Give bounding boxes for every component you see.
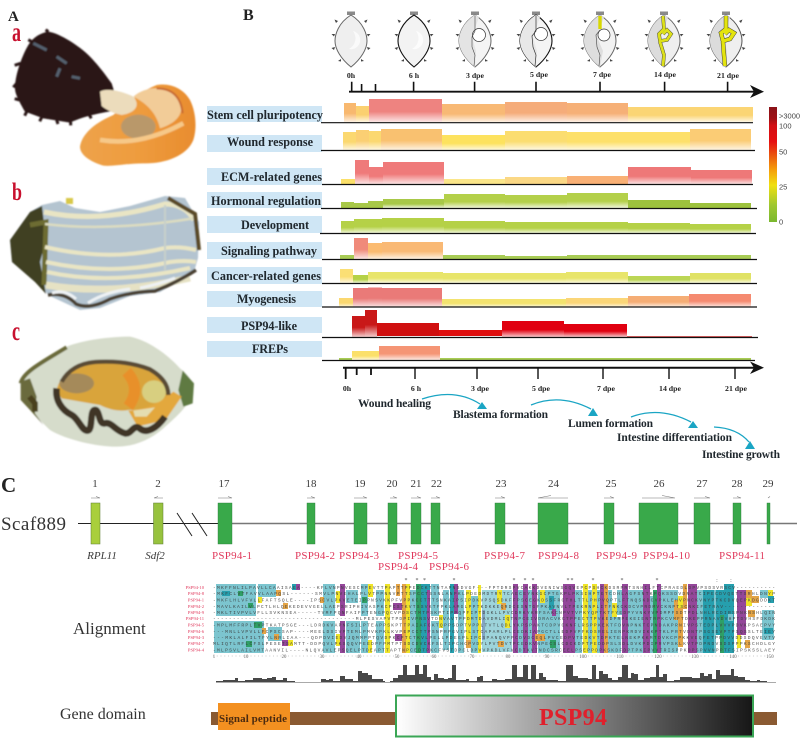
residue colour blocks xyxy=(214,584,774,653)
signal peptide block: Signal peptide xyxy=(219,713,287,725)
position ruler xyxy=(213,655,775,660)
chart row: Development: Development xyxy=(241,218,309,232)
position ruler: 60 xyxy=(432,655,437,660)
aligned residues: -MKLTIVPVLVFLLSVKNSEA-----TVMFPQNFAIFPTENGPQCVPDSCTMTPSKPTIPPQPFIPTDGKLLPVCDRKYKRFSAKCNPVTVPKYQPTKTFYEDPYVNKYVPDMPFSDTPDLNHLRCDIRSPNKNSHLQIN xyxy=(213,610,775,616)
top timeline arrow: 5 dpe xyxy=(530,70,549,79)
sequence names: PSP94-10 xyxy=(186,585,205,590)
position ruler: 100 xyxy=(579,655,587,660)
chart row: Signaling pathway: Signaling pathway xyxy=(221,244,317,258)
alignment heading: Alignment xyxy=(73,619,146,638)
gene domain diagram xyxy=(211,696,777,736)
aligned residues: -MAVLKAILVLPCTLHLQEKEDEVVGELLAEPSRIPHIVASPKCPCSTKVTSSVKTFPKLAMGLPPTKDKKEQRDCESNTGFPKAVNVLTPEKRNPLITFNKCKDCVPRDMVCKNPTSCNKIFETRAV------------- xyxy=(213,604,775,610)
process flow: healing stages and arrows: Wound healing xyxy=(358,398,431,410)
bottom timeline arrow: 6 h xyxy=(411,384,422,393)
aligned residues: -MKFCLVTFAVVLAAPQSL------SMVLPNVEHALPLVTPPNNVPTTSPCCTSSNLANPKLPDEDMDTRYTCAECEYNKGCPTGKPLPKSIHPTGTCDHLAGFSNTKPQKSSDVDNATCIPECDVQETTSRHLDNYP xyxy=(213,591,775,597)
aligned residues: ------------------------------------MLPESVAPVTPDPIVPNSVTDNVAVTPPDMTDAVDMLIQTNPCEIVDRACVKCTPPECTTPVKEDPRPEKEIENTRPKCVMFTDKEPPRNAVDVHPTDVHSFDKDK xyxy=(213,616,775,622)
sequence names: PSP94-1 xyxy=(188,598,205,602)
icon: shell at 0h xyxy=(332,12,370,67)
conservation markers: * xyxy=(524,578,526,584)
process flow: healing stages and arrows: Blastema formation xyxy=(453,409,549,421)
gene map track: RPL11 xyxy=(86,550,117,562)
process flow: healing stages and arrows: Lumen formation xyxy=(568,418,654,430)
chart row: ECM-related genes: ECM-related genes xyxy=(221,170,322,184)
gene map track: 28 xyxy=(732,478,743,490)
gene map track: 23 xyxy=(496,478,507,490)
top timeline arrow: 7 dpe xyxy=(593,70,612,79)
aligned residues xyxy=(213,585,775,654)
position ruler: 110 xyxy=(616,655,624,660)
panel label b: b xyxy=(12,177,22,206)
gene map track: 20 xyxy=(386,478,398,490)
bottom timeline arrow: 14 dpe xyxy=(659,384,681,393)
colour scale legend: 0 xyxy=(779,218,783,226)
gene map track: PSP94-11 xyxy=(719,550,765,562)
conservation markers: * xyxy=(566,578,570,584)
sequence names: PSP94-7 xyxy=(188,641,205,646)
gene map track: 18 xyxy=(306,478,317,490)
panel label B: B xyxy=(243,7,254,24)
chart row: Myogenesis: Myogenesis xyxy=(237,292,296,306)
conservation markers: * xyxy=(592,578,594,584)
sequence names: PSP94-11 xyxy=(186,616,205,621)
bottom timeline arrow: 5 dpe xyxy=(532,384,551,393)
panel label c: c xyxy=(12,316,20,346)
bottom timeline arrow: 21 dpe xyxy=(725,384,747,393)
aligned residues: -MPLMFFRPLTVPTKATPSGE---LDRDKVAPNFSILPTEAPPSKPTTPAIAFCKTQPPSDPTVPPLTVTLQDLYKPSPAKTCDPVCKNFLRSPPKEKTFDVNPNKTCPNDAKPRNIVPSTEDPLVVVPDVKPSAEPVY xyxy=(213,622,775,628)
chart row: Cancer-related genes: Cancer-related genes xyxy=(211,269,321,283)
chart row: PSP94-like: PSP94-like xyxy=(241,319,298,333)
sequence alignment xyxy=(186,578,775,660)
gene map track: 22 xyxy=(431,478,442,490)
top timeline arrow: 0h xyxy=(347,71,356,80)
bottom timeline arrow: 0h xyxy=(343,384,352,393)
icon: shell at 6 h xyxy=(394,12,434,67)
position ruler: 150 xyxy=(766,655,774,660)
process flow: healing stages and arrows xyxy=(358,395,781,461)
position ruler: 90 xyxy=(545,655,550,660)
sequence names: PSP94-5 xyxy=(188,622,205,628)
gene map track: PSP94-9 xyxy=(596,550,638,562)
conservation markers: * xyxy=(452,578,456,584)
gene map track: PSP94-5 xyxy=(398,550,438,562)
process flow: healing stages and arrows: Intestine growth xyxy=(702,449,781,461)
position ruler: 1 xyxy=(213,655,216,660)
gene map track: PSP94-10 xyxy=(643,550,690,562)
top timeline arrow: 3 dpe xyxy=(466,71,485,80)
gene map track: 1 xyxy=(92,478,98,490)
gene map track: 19 xyxy=(354,478,366,490)
colour scale legend xyxy=(769,107,800,226)
colour scale legend: 25 xyxy=(779,182,787,192)
position ruler: 120 xyxy=(654,655,662,660)
sequence names: PSP94-9 xyxy=(188,610,205,615)
icon: shell at 5 dpe xyxy=(516,12,556,67)
sequence names: PSP94-4 xyxy=(188,648,205,652)
gene map track: PSP94-4 xyxy=(378,561,418,573)
chart row: Signaling pathway xyxy=(207,238,757,260)
conservation histogram xyxy=(216,665,776,682)
chart row: Myogenesis xyxy=(207,288,757,307)
sequence names: PSP94-8 xyxy=(188,591,205,596)
icon: shell at 7 dpe xyxy=(580,12,620,67)
chart row: ECM-related genes xyxy=(207,160,753,185)
gene map track: PSP94-3 xyxy=(339,550,380,562)
panel label a: a xyxy=(12,17,21,47)
PSP94 domain block: PSP94 xyxy=(539,705,607,731)
gene map track: 21 xyxy=(410,478,422,490)
position ruler: 80 xyxy=(506,655,511,660)
process flow: healing stages and arrows: Intestine differentiation xyxy=(617,432,733,444)
gene map track: 17 xyxy=(218,478,230,490)
aligned residues: -MLPSVLAILVMTAANVIL----NLQVAVLEPSQELPTDEAPTTAPTNPCEDTPKCFVSTDPCLDPVVPKDLVFVCDTKVTNDCSRCEELPSEPPDPKSKDFDPTPKIPVVTRISPPKDPSPVVNPPTFSIPSKSSLAEY xyxy=(213,648,775,654)
position ruler: 130 xyxy=(691,655,699,660)
conservation markers: * xyxy=(404,578,408,584)
bottom timeline arrow xyxy=(343,362,764,393)
gene map track: 29 xyxy=(762,478,774,490)
gene map track: PSP94-6 xyxy=(429,561,470,573)
gene map track: 25 xyxy=(606,478,617,490)
gene map track: 27 xyxy=(696,478,708,490)
chart row: Hormonal regulation xyxy=(207,192,757,208)
position ruler: 70 xyxy=(470,655,475,660)
conservation markers: * xyxy=(416,578,418,584)
gene map track: 2 xyxy=(155,478,161,490)
colour scale legend: 50 xyxy=(779,148,787,156)
icon: shell at 3 dpe xyxy=(456,12,494,67)
chart row: Stem cell pluripotency xyxy=(207,99,753,123)
top timeline arrow: 14 dpe xyxy=(654,70,676,79)
top timeline arrow xyxy=(347,70,764,98)
sequence names xyxy=(186,585,205,652)
conservation markers: * xyxy=(423,578,426,584)
gene map track: PSP94-7 xyxy=(484,550,526,562)
PSP94 domain block xyxy=(396,696,753,736)
conservation markers: * xyxy=(570,578,574,584)
position ruler: 50 xyxy=(395,655,400,660)
position ruler: 20 xyxy=(282,655,287,660)
aligned residues: ---MNLLVPVLLFCPSCSAP----MEELDSIVPTEMLPMVKPKLKVPEPCCTTPSNPRPGVIPLSTCAPAMLPLCEDKIAPGCTLLEDPVPFKDSRELIENPKRDVIKKPTKLPRTVDNTPSGSEVPTPSQSSLTEIEY xyxy=(213,629,775,635)
gene map track: PSP94-8 xyxy=(538,550,580,562)
photo: abalone ventral view with gut xyxy=(20,337,194,447)
chart row: Stem cell pluripotency: Stem cell pluripotency xyxy=(207,108,323,122)
signal peptide block xyxy=(218,703,290,730)
sequence names: PSP94-3 xyxy=(188,635,205,640)
sequence names: PSP94-6 xyxy=(188,629,205,634)
photo: abalone foot dorsal view xyxy=(10,196,199,310)
photo: opened abalone with shell and orange tissue xyxy=(13,30,196,166)
sequence names: PSP94-2 xyxy=(188,604,205,609)
chart row: Cancer-related genes xyxy=(207,267,757,284)
scaffold label: Scaf889 xyxy=(1,514,66,535)
conservation markers: * xyxy=(620,578,624,584)
top timeline arrow: 21 dpe xyxy=(717,71,739,80)
gene map track: 26 xyxy=(654,478,665,490)
gene map track xyxy=(78,478,797,573)
position ruler: 10 xyxy=(244,655,249,660)
panel label C: C xyxy=(1,473,16,497)
position ruler: 30 xyxy=(320,655,325,660)
chart row: Development xyxy=(207,216,756,234)
gene map track: PSP94-1 xyxy=(212,550,252,562)
gene map track: 24 xyxy=(548,478,560,490)
top timeline arrow: 6 h xyxy=(409,71,420,80)
aligned residues: MLIQTLRFLCFSLPESETSAMTT-DDPQVLPKSQQVPEEDPFPMTPTSDCDVCKFSLTIPCHCPVDYLPVTDVTPCEDKVNPECSLCDCKDPTPEDDPSLSDLDVKPDIPRVPSKLKVTPDPNDVSDSPPPKSCHDLGY xyxy=(213,641,775,647)
bottom timeline arrow: 3 dpe xyxy=(471,384,490,393)
icon: shell at 14 dpe xyxy=(644,12,684,67)
aligned residues: -MKFFNLILPAVLLCAAISAEA----KFLVNPNVESCMPEVTTPAPTTPPEDCKTTNTAPNSDVGF---FPTDRSPVCAKKDVENIWSGQVEPCPSHCKDSRPRTSNHILFTCPRAEDLDPVPSDSVRSCV---------- xyxy=(213,585,775,591)
bottom timeline arrow: 7 dpe xyxy=(597,384,616,393)
chart row: FREPs: FREPs xyxy=(252,342,288,356)
chart row: PSP94-like xyxy=(207,310,758,338)
conservation markers: : xyxy=(730,578,732,584)
conservation markers: * xyxy=(532,578,534,584)
position ruler: 140 xyxy=(729,655,737,660)
gene map track: Sdf2 xyxy=(145,550,165,562)
chart row: Wound response xyxy=(207,129,755,152)
conservation markers: * xyxy=(512,578,516,584)
chart row: Hormonal regulation: Hormonal regulation xyxy=(211,194,321,208)
gene domain heading: Gene domain xyxy=(60,706,146,723)
chart row: FREPs xyxy=(207,341,755,360)
colour scale legend: 100 xyxy=(779,122,792,130)
stage icons row xyxy=(332,12,746,67)
panel label A: A xyxy=(8,9,19,25)
position ruler: 40 xyxy=(357,655,362,660)
conservation markers: * xyxy=(656,578,658,584)
chart row: Wound response: Wound response xyxy=(227,135,314,149)
conservation markers: : xyxy=(716,578,718,584)
icon: shell at 21 dpe xyxy=(706,12,746,67)
conservation markers xyxy=(404,578,732,584)
colour scale legend: >3000 xyxy=(779,112,800,120)
aligned residues: ---MKLALFILTFYLNRLIAA---QDPDVIEDVJQMMPPTQVDPKCPTCTKVLPELLPDEGPLIPCSPANQVPPCDVDCEQLPVCEDPVTEDKVTDPKTELNEKPKKMTDVKCPPKKVEQFETPPDVVDDSDQVEVTV xyxy=(213,635,775,641)
gene map track: PSP94-2 xyxy=(295,550,335,562)
aligned residues: -MKFLHLVFVLLFAFTSQLE----IPSCVLPKVETEIPPNSVKKPFVPPKCCTTTSNKAIPSIPDKVPSQSDKFFPSCEGKDSSFRCTHLTTLPHPVQPTLFTNQSKDCVPKLEHVPNCKVNYPTKCDVQEPKDGDDKT xyxy=(213,598,775,604)
